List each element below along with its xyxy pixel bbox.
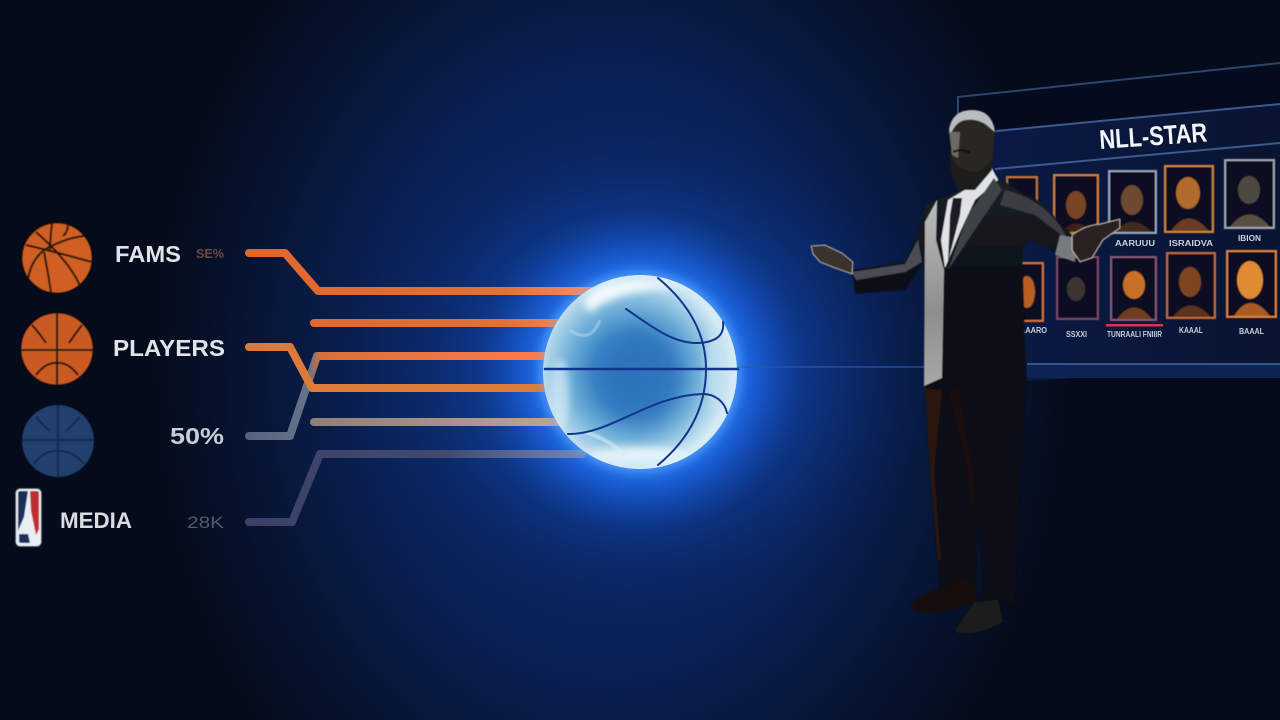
light jacket panel [924, 200, 944, 386]
shirt and collar [941, 168, 998, 268]
connector: tan bar [314, 418, 560, 426]
connector lines [249, 253, 592, 522]
portrait 1 [1007, 177, 1037, 237]
left sleeve highlight [852, 240, 922, 280]
value: 28K: 28K [187, 513, 225, 532]
portrait captions: AAARO [1020, 326, 1047, 335]
portrait captions: KAAAL [1179, 326, 1203, 335]
portrait captions: SSXXI [1066, 330, 1087, 339]
portrait 7 [1057, 257, 1098, 319]
connector: navy line to 50% [249, 356, 545, 436]
value: fans percent: SE% [196, 246, 224, 261]
basketball icon: players [21, 313, 93, 385]
tie [948, 198, 962, 262]
connector: second orange bar [314, 319, 558, 327]
portrait captions: AARUUU [1115, 239, 1155, 248]
right hand [1072, 219, 1120, 262]
ball texture [551, 279, 730, 465]
lapel [948, 178, 1002, 270]
portrait grid [1007, 160, 1276, 321]
value: 50%: 50% [170, 423, 224, 449]
label: MEDIA: MEDIA [60, 508, 132, 533]
portrait captions: ISRAIDVA [1169, 239, 1213, 248]
display screen [958, 62, 1280, 381]
central glow halo [475, 207, 805, 537]
portrait 5 [1225, 160, 1274, 228]
portrait 2 [1054, 175, 1098, 233]
basketball icon: navy [22, 405, 94, 477]
faint horizontal light beam [730, 366, 930, 368]
portrait 10 [1227, 251, 1276, 317]
portrait captions: TUNRAALI FNIIIR [1107, 330, 1162, 339]
connector: media [249, 454, 582, 522]
portrait 4 [1165, 166, 1213, 232]
connector: fans [249, 253, 592, 291]
ball seams [545, 278, 738, 465]
portrait 8 [1111, 257, 1156, 320]
presenter figure [811, 110, 1120, 633]
portrait 9 [1167, 253, 1215, 318]
portrait captions: IBION [1238, 234, 1261, 243]
shoulder highlight [1000, 190, 1068, 240]
label: FAMS: FAMS [115, 241, 181, 267]
label: PLAYERS: PLAYERS [113, 335, 225, 361]
icon: NBA logo [16, 489, 41, 546]
red highlight bar [1106, 324, 1163, 326]
left hand [811, 245, 853, 274]
portrait captions [1020, 234, 1264, 339]
jacket and arms [852, 175, 1076, 388]
screen title: NLL-STAR [1098, 118, 1208, 155]
portrait captions: BAAAL [1239, 327, 1264, 336]
trousers [925, 375, 1026, 605]
connector: players [249, 347, 546, 388]
portrait 3 [1109, 171, 1156, 233]
glowing basketball [539, 271, 741, 473]
shoes [912, 575, 978, 612]
basketball icon: fans [22, 223, 92, 293]
portrait 6 [1019, 263, 1043, 321]
neck and head [950, 150, 994, 190]
